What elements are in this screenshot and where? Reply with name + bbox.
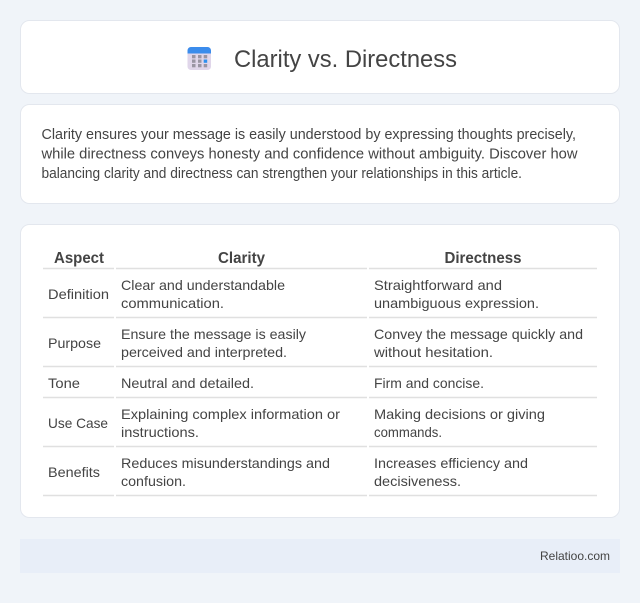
- row: purpose: Purpose: [48, 335, 101, 351]
- row: use case: Explaining complex information or: [121, 406, 340, 422]
- row: purpose: [48, 326, 583, 360]
- row: tone: Tone: [48, 375, 80, 391]
- row: definition: unambiguous expression.: [374, 295, 539, 311]
- row: benefits: [48, 455, 528, 489]
- row: purpose: Convey the message quickly and: [374, 326, 583, 342]
- row: tone: Neutral and detailed.: [121, 375, 254, 391]
- text block: introduction: while directness conveys honesty and confidence without ambiguity. Discover how: [40, 146, 578, 162]
- row: tone: Firm and concise.: [374, 375, 484, 391]
- row: purpose: perceived and interpreted.: [121, 344, 287, 360]
- text block: introduction: balancing clarity and directness can strengthen your relationships in this article.: [42, 166, 522, 182]
- icon: calendar: [188, 47, 211, 70]
- row: purpose: Ensure the message is easily: [121, 326, 306, 342]
- row: definition: Definition: [48, 286, 109, 302]
- row: use case: [48, 406, 545, 440]
- table header row: Directness: [444, 250, 522, 267]
- footer: [20, 539, 620, 573]
- row: definition: Clear and understandable: [121, 277, 285, 293]
- row: benefits: confusion.: [121, 473, 186, 489]
- footer text: Relatioo.com: [540, 549, 610, 563]
- row: tone: [48, 375, 484, 391]
- table header row: Aspect: [54, 250, 104, 267]
- text block: introduction: Clarity ensures your message is easily understood by expressing thoughts precisely,: [42, 127, 576, 143]
- table header row: [54, 250, 522, 267]
- row: benefits: Increases efficiency and: [374, 455, 528, 471]
- panel: introduction: [20, 104, 620, 204]
- row: use case: Use Case: [48, 415, 108, 431]
- panel: header: [20, 20, 620, 94]
- row: benefits: Benefits: [48, 464, 100, 480]
- row: use case: instructions.: [121, 424, 199, 440]
- panel: comparison table: [20, 224, 620, 518]
- title: Clarity vs. Directness: [234, 46, 457, 73]
- row: purpose: without hesitation.: [373, 344, 493, 360]
- table header row: Clarity: [218, 250, 265, 267]
- row: definition: Straightforward and: [374, 277, 502, 293]
- row: benefits: decisiveness.: [374, 473, 461, 489]
- row: definition: communication.: [121, 295, 224, 311]
- row: definition: [48, 277, 539, 311]
- row: use case: commands.: [374, 424, 442, 440]
- row: use case: Making decisions or giving: [374, 406, 545, 422]
- row: benefits: Reduces misunderstandings and: [121, 455, 330, 471]
